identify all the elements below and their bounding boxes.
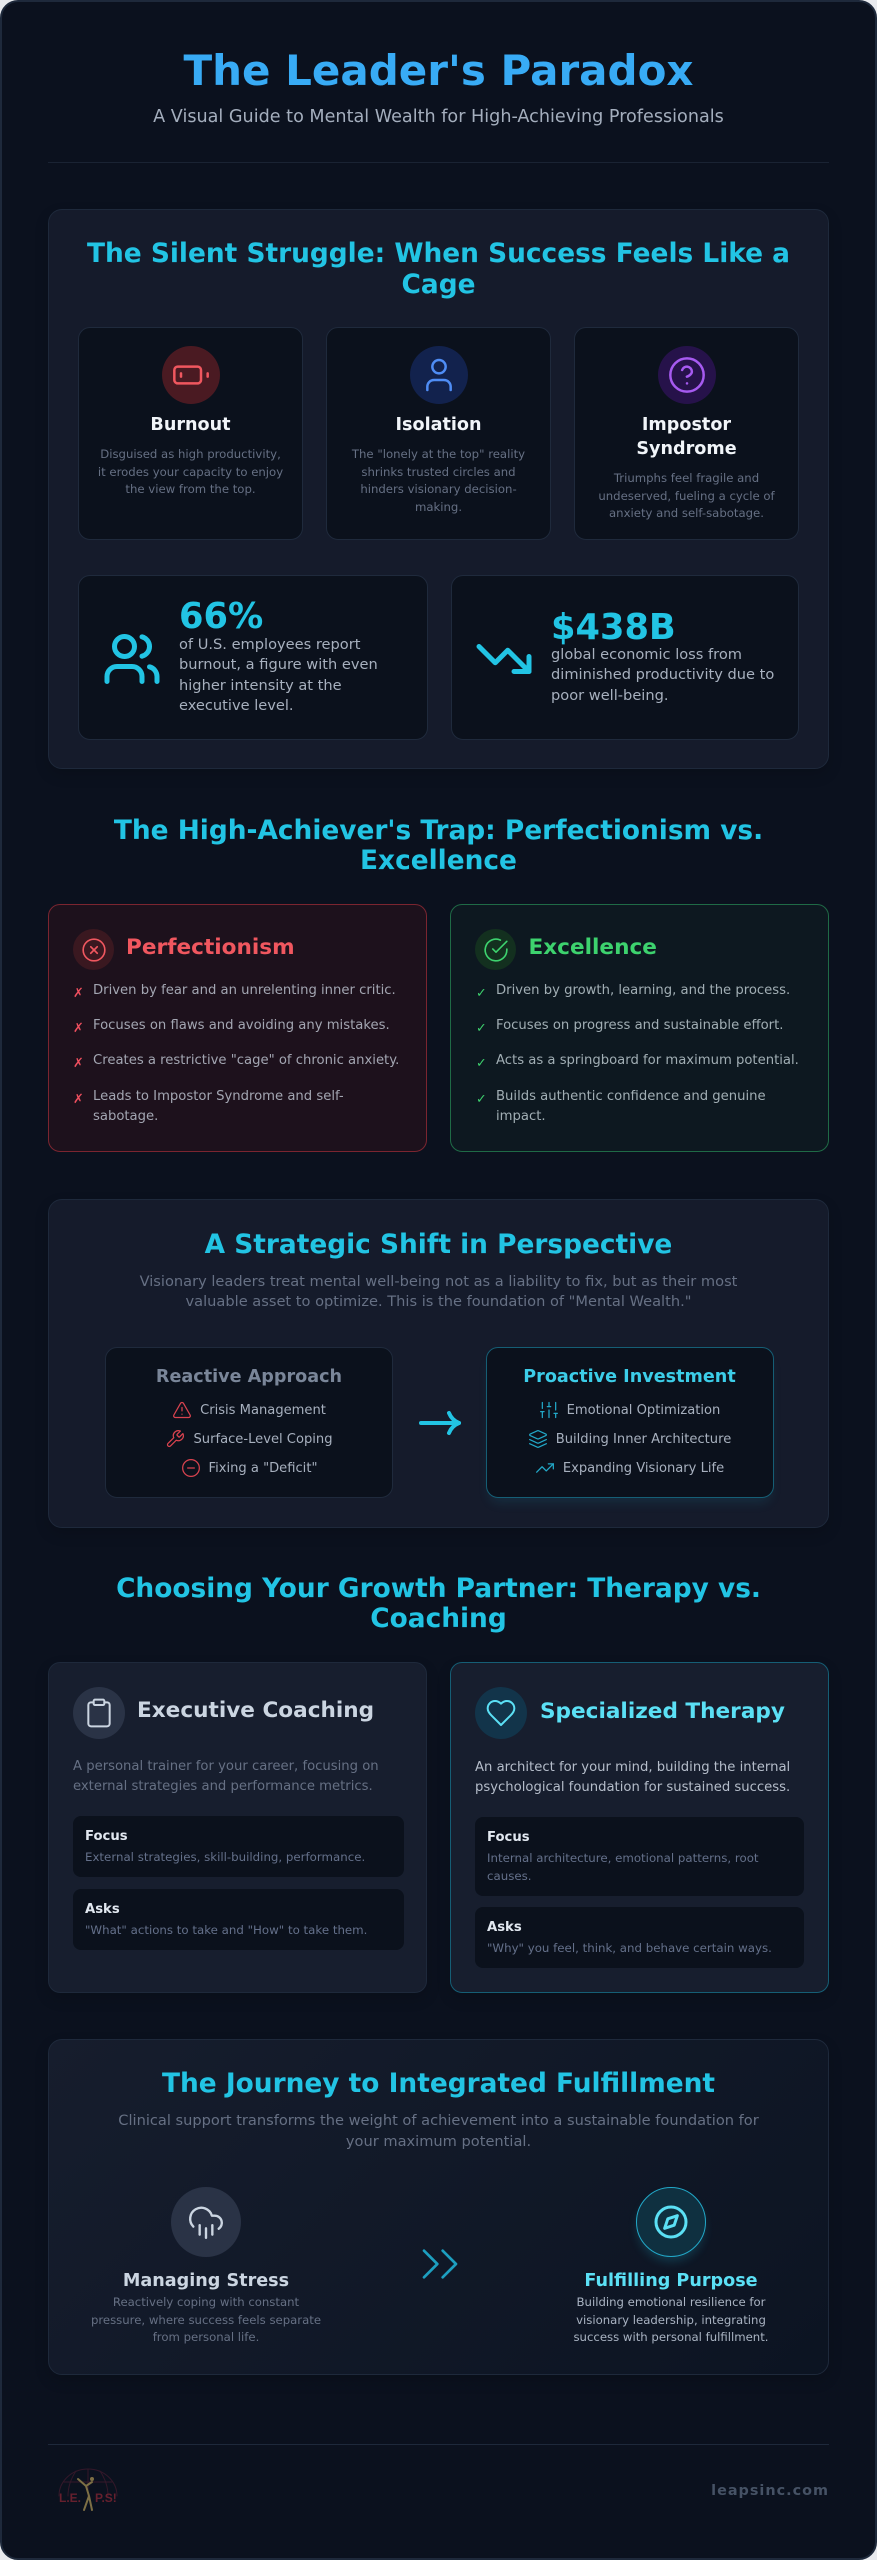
box: asks <box>73 1889 404 1950</box>
box: focus <box>475 1817 804 1896</box>
stat text: global economic loss from <box>551 646 742 663</box>
list: perfectionism traits <box>73 983 399 1124</box>
card text <box>352 447 525 514</box>
card text: Disguised as high productivity, <box>100 447 281 461</box>
heading: silent struggle <box>87 238 790 300</box>
panel title: Perfectionism <box>126 935 295 960</box>
icon: trending down <box>476 644 532 674</box>
website: leapsinc.com <box>711 2483 829 2499</box>
card text: undeserved, fueling a cycle of <box>598 488 775 502</box>
panel: executive coaching <box>48 1662 427 1993</box>
heading: journey: The Journey to Integrated Fulfillment <box>162 2068 715 2099</box>
card title: Impostor <box>642 415 731 435</box>
section intro <box>140 1273 737 1310</box>
card text: Triumphs feel fragile and <box>614 471 759 485</box>
heading: growth partner <box>116 1573 761 1634</box>
item: surface-level coping: Surface-Level Coping <box>193 1432 333 1446</box>
stat card: $438B <box>451 575 799 740</box>
panel: excellence <box>450 904 829 1152</box>
panel: strategic shift <box>48 1199 829 1528</box>
list: perfectionism traits: Focuses on flaws and avoiding any mistakes. <box>93 1018 390 1033</box>
item: crisis management: Crisis Management <box>200 1402 326 1418</box>
label: Focus <box>487 1830 530 1845</box>
list: excellence traits: impact. <box>496 1109 546 1124</box>
step text <box>573 2295 769 2344</box>
panel title: Executive Coaching <box>137 1698 374 1723</box>
section intro: your maximum potential. <box>346 2133 531 2150</box>
stat text: burnout, a figure with even <box>179 656 378 673</box>
item: building inner architecture: Building Inner Architecture <box>556 1432 731 1446</box>
list: excellence traits: ✓ <box>476 1092 487 1107</box>
icon: cloud rain <box>171 2187 241 2257</box>
list: excellence traits: Focuses on progress and sustainable effort. <box>496 1018 783 1033</box>
box: asks <box>475 1907 804 1968</box>
panel: the silent struggle <box>48 209 829 769</box>
heading: silent struggle: Cage <box>402 268 475 300</box>
stat value: 66% <box>179 596 263 637</box>
list: excellence traits: ✓ <box>476 986 487 1001</box>
step text: success with personal fulfillment. <box>573 2330 769 2344</box>
step title: Fulfilling Purpose <box>584 2271 758 2291</box>
card title: Burnout <box>150 415 231 435</box>
panel title: Excellence <box>528 935 657 960</box>
icon: heart <box>475 1687 527 1739</box>
list: excellence traits: ✓ <box>476 1056 487 1071</box>
icon: users <box>104 634 160 684</box>
card text: the view from the top. <box>125 482 256 496</box>
stat text <box>179 636 378 714</box>
step text: Reactively coping with constant <box>113 2295 299 2309</box>
heading: high-achiever's trap: The High-Achiever's Trap: Perfectionism vs. <box>114 815 763 846</box>
panel: specialized therapy <box>450 1662 829 1993</box>
item: expanding visionary life: Expanding Visionary Life <box>563 1460 724 1476</box>
list: excellence traits: ✓ <box>476 1021 487 1036</box>
label: Asks <box>85 1902 120 1917</box>
panel: the journey <box>48 2039 829 2375</box>
logo <box>58 2468 118 2511</box>
card: isolation <box>326 327 551 540</box>
stat text: executive level. <box>179 697 294 714</box>
list: perfectionism traits: ✗ <box>73 1021 84 1036</box>
panel title: Specialized Therapy <box>540 1699 785 1724</box>
card title: Reactive Approach <box>156 1367 342 1387</box>
stat card: 66% <box>78 575 428 740</box>
text: "Why" you feel, think, and behave certain ways. <box>487 1941 772 1955</box>
card: proactive investment <box>486 1347 774 1498</box>
list: perfectionism traits: ✗ <box>73 1092 84 1107</box>
section intro <box>118 2112 759 2150</box>
section intro: valuable asset to optimize. This is the foundation of "Mental Wealth." <box>186 1293 691 1310</box>
stat text: higher intensity at the <box>179 677 342 694</box>
icon: battery low <box>162 346 220 404</box>
panel: perfectionism <box>48 904 427 1152</box>
card: impostor syndrome <box>574 327 799 540</box>
text <box>487 1851 759 1883</box>
label: Focus <box>85 1829 128 1844</box>
icon: compass <box>636 2187 706 2257</box>
stat text: poor well-being. <box>551 687 668 704</box>
card title <box>636 415 737 458</box>
step: managing stress <box>91 2187 321 2344</box>
card title: Syndrome <box>636 438 737 458</box>
heading: silent struggle: The Silent Struggle: When Success Feels Like a <box>87 238 790 269</box>
card text: making. <box>415 500 462 514</box>
card title: Isolation <box>395 415 482 435</box>
label: Asks <box>487 1920 522 1935</box>
list: perfectionism traits: sabotage. <box>93 1109 158 1124</box>
step text: visionary leadership, integrating <box>576 2312 766 2326</box>
card: reactive approach <box>105 1347 393 1498</box>
step text <box>91 2295 321 2344</box>
stat text: of U.S. employees report <box>179 636 360 653</box>
text: External strategies, skill-building, performance. <box>85 1850 365 1864</box>
list: excellence traits <box>476 983 799 1124</box>
icon: check circle <box>475 929 516 970</box>
icon: clipboard <box>73 1687 125 1739</box>
panel text <box>73 1759 379 1794</box>
card text <box>98 447 283 496</box>
text: Internal architecture, emotional patterns, root <box>487 1851 759 1865</box>
logo: P.S! <box>95 2491 117 2505</box>
list: perfectionism traits: ✗ <box>73 986 84 1001</box>
stat text <box>551 646 774 704</box>
stat value: $438B <box>551 607 676 648</box>
item: fixing a deficit <box>182 1459 317 1477</box>
step title: Managing Stress <box>123 2271 289 2291</box>
text: causes. <box>487 1869 532 1883</box>
item: fixing a deficit: Fixing a "Deficit" <box>209 1460 317 1476</box>
title: The Leader's Paradox <box>183 46 694 95</box>
step: fulfilling purpose <box>573 2187 769 2344</box>
list: excellence traits: Driven by growth, learning, and the process. <box>496 983 790 998</box>
list: perfectionism traits: Driven by fear and an unrelenting inner critic. <box>93 983 396 998</box>
card text: The "lonely at the top" reality <box>352 447 525 461</box>
card text: anxiety and self-sabotage. <box>609 506 764 520</box>
arrow: reactive to proactive <box>419 1410 462 1436</box>
section intro: Clinical support transforms the weight of achievement into a sustainable foundation for <box>118 2112 759 2129</box>
card text: hinders visionary decision- <box>360 482 517 496</box>
text: "What" actions to take and "How" to take them. <box>85 1923 367 1937</box>
subtitle: A Visual Guide to Mental Wealth for High-Achieving Professionals <box>153 107 724 127</box>
arrow: chevrons <box>422 2249 458 2279</box>
card text <box>598 471 775 520</box>
panel text: A personal trainer for your career, focusing on <box>73 1759 379 1774</box>
step text: from personal life. <box>153 2330 259 2344</box>
panel text: An architect for your mind, building the internal <box>475 1760 790 1775</box>
icon: question circle <box>658 346 716 404</box>
card title: Proactive Investment <box>523 1367 736 1387</box>
list: excellence traits: Builds authentic confidence and genuine <box>496 1089 766 1104</box>
list: perfectionism traits: Creates a restrictive "cage" of chronic anxiety. <box>93 1053 399 1068</box>
list: perfectionism traits: Leads to Impostor Syndrome and self- <box>93 1089 344 1104</box>
heading: strategic shift: A Strategic Shift in Perspective <box>205 1229 672 1260</box>
list: perfectionism traits: ✗ <box>73 1056 84 1071</box>
logo: L.E. <box>59 2491 81 2505</box>
section intro: Visionary leaders treat mental well-being not as a liability to fix, but as their most <box>140 1273 737 1290</box>
item: emotional optimization: Emotional Optimization <box>567 1402 720 1418</box>
heading: growth partner: Coaching <box>370 1602 507 1634</box>
heading: high-achiever's trap <box>114 815 763 876</box>
stat text: diminished productivity due to <box>551 666 774 683</box>
panel text: external strategies and performance metrics. <box>73 1779 373 1794</box>
step text: pressure, where success feels separate <box>91 2312 321 2326</box>
card text: it erodes your capacity to enjoy <box>98 464 283 478</box>
box: focus <box>73 1816 404 1877</box>
panel text: psychological foundation for sustained success. <box>475 1780 790 1795</box>
heading: high-achiever's trap: Excellence <box>360 844 517 876</box>
card text: shrinks trusted circles and <box>361 464 516 478</box>
card: burnout <box>78 327 303 540</box>
icon: user <box>410 346 468 404</box>
list: excellence traits: Acts as a springboard for maximum potential. <box>496 1053 799 1068</box>
step text: Building emotional resilience for <box>577 2295 765 2309</box>
panel text <box>475 1760 790 1795</box>
heading: growth partner: Choosing Your Growth Partner: Therapy vs. <box>116 1573 761 1604</box>
icon: x circle <box>73 929 114 970</box>
